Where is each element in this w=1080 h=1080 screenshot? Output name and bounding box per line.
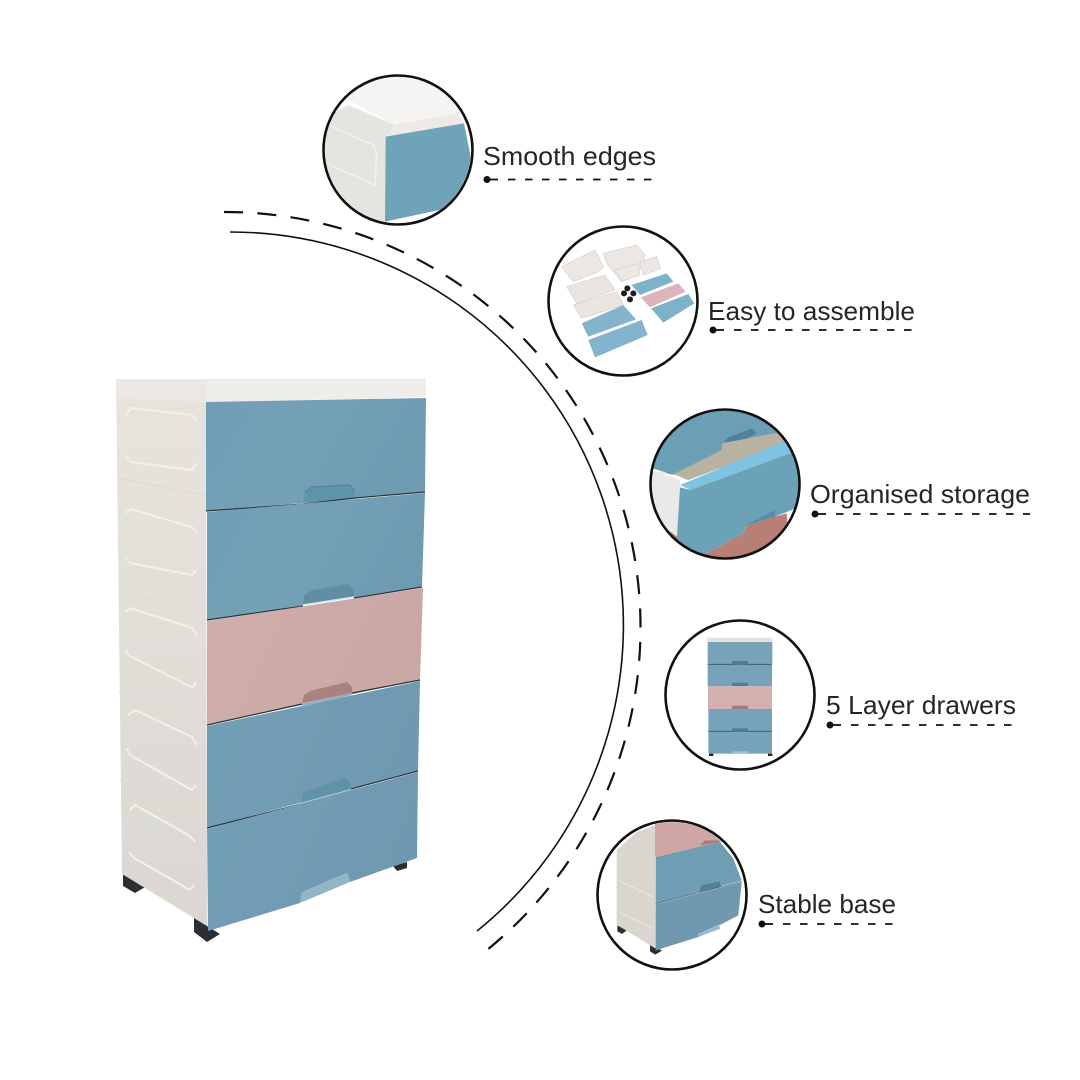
- cabinet feet: [123, 862, 407, 942]
- black feet: [621, 285, 636, 302]
- cabinet base close-up: [617, 820, 742, 955]
- dashed arc: [224, 212, 641, 950]
- side embossed panels: [125, 408, 197, 890]
- circle outline: [324, 76, 472, 224]
- label: 5 Layer drawers: 5 Layer drawers: [826, 690, 1016, 720]
- circle outline: [666, 620, 814, 770]
- circle: easy to assemble parts: [548, 226, 698, 376]
- drawer 2: [207, 493, 425, 620]
- circle outline: [650, 410, 800, 558]
- open drawer close-up: [652, 410, 798, 558]
- white trays: [562, 245, 661, 282]
- mini front view of cabinet: [707, 638, 772, 756]
- drawer 1: [206, 398, 426, 511]
- label: Easy to assemble: Easy to assemble: [708, 296, 915, 326]
- solid arc: [230, 232, 623, 931]
- label: Smooth edges: Smooth edges: [483, 141, 656, 171]
- label: Organised storage: Organised storage: [810, 479, 1030, 509]
- drawer 4: [207, 681, 420, 828]
- circle: stable base: [598, 820, 746, 970]
- circle outline: [598, 820, 746, 970]
- circle: organised storage: [649, 408, 801, 560]
- circle: 5 layer drawers: [666, 620, 814, 770]
- circle outline: [548, 226, 698, 376]
- circle: smooth edges detail: [322, 74, 474, 226]
- cabinet side panel: [116, 379, 207, 926]
- white panels: [567, 275, 623, 318]
- drawer 3 pink: [207, 588, 423, 725]
- corner close-up: [325, 77, 471, 222]
- cabinet top: [116, 379, 426, 402]
- label: Smooth edges: [483, 141, 656, 183]
- drawer 5: [207, 772, 418, 931]
- label: Stable base: Stable base: [758, 889, 896, 919]
- side seams: [117, 478, 206, 826]
- product: five-layer drawer cabinet: [116, 379, 426, 942]
- blue and pink panels: [582, 273, 694, 357]
